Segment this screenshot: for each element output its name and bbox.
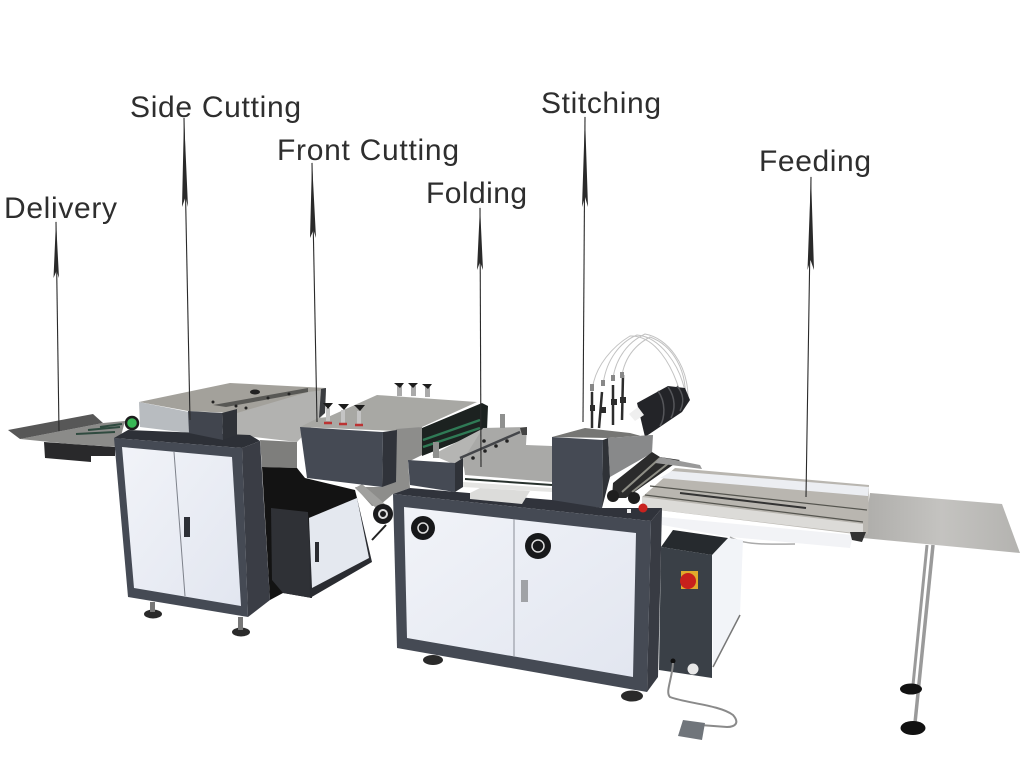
wire stitching heads — [590, 372, 626, 428]
label arrow: Front Cutting — [310, 161, 317, 422]
machine: stitching unit — [552, 334, 702, 508]
label arrow: Side Cutting — [182, 116, 190, 420]
centre cover — [300, 395, 477, 431]
icon: white knob — [688, 664, 698, 674]
icon: rotary dial left — [411, 516, 435, 540]
label: Side Cutting: Side Cutting — [130, 91, 301, 124]
table legs — [900, 545, 933, 735]
icon: green roller — [126, 417, 138, 429]
label: Folding: Folding — [426, 177, 527, 210]
top block — [222, 409, 237, 440]
small knobs on cutting box — [323, 403, 365, 424]
fold box — [455, 458, 463, 492]
cover front — [139, 402, 189, 433]
machine: extension table and legs — [863, 493, 1020, 735]
left cabinet side — [242, 441, 270, 617]
machine: side cutting unit — [114, 383, 386, 636]
machine: main lower cabinet — [393, 488, 662, 702]
machine: control box with switch — [659, 530, 743, 740]
drive arm and wheel — [355, 484, 393, 524]
icon: rotary dial right — [525, 533, 551, 559]
left cabinet doors — [122, 447, 241, 606]
wire spool roller — [629, 386, 690, 437]
label: Delivery: Delivery — [4, 192, 117, 225]
left cabinet front — [114, 438, 248, 617]
label: Feeding: Feeding — [759, 145, 871, 178]
left cabinet top — [114, 430, 260, 448]
label: Front Cutting: Front Cutting — [277, 134, 459, 167]
wire arcs — [592, 334, 688, 402]
label arrow: Delivery — [54, 220, 59, 431]
label arrow: Stitching — [582, 115, 588, 422]
machine: feeding table — [642, 468, 869, 548]
icon: power switch — [680, 571, 698, 589]
label arrow: Folding — [477, 206, 483, 467]
icon: red stop button — [638, 504, 648, 512]
machine: front cutting and folding centre — [300, 383, 488, 524]
extension plate — [863, 493, 1020, 553]
cabinet doors — [404, 507, 636, 677]
cabinet feet — [423, 655, 443, 665]
green conveyor cavity — [422, 403, 488, 456]
three adjusting knobs — [394, 383, 432, 397]
front cutting box — [382, 430, 397, 487]
cover right panel — [237, 390, 325, 442]
machine: folding board — [408, 414, 552, 492]
lower side cabinet — [271, 508, 312, 598]
label arrow: Feeding — [806, 175, 814, 497]
dark inner cavity — [262, 467, 357, 600]
cover top — [139, 383, 326, 413]
label: Stitching: Stitching — [541, 87, 661, 120]
machine: delivery tray — [8, 414, 138, 462]
foot pedal with cable — [668, 663, 736, 740]
levelling feet — [144, 610, 162, 618]
